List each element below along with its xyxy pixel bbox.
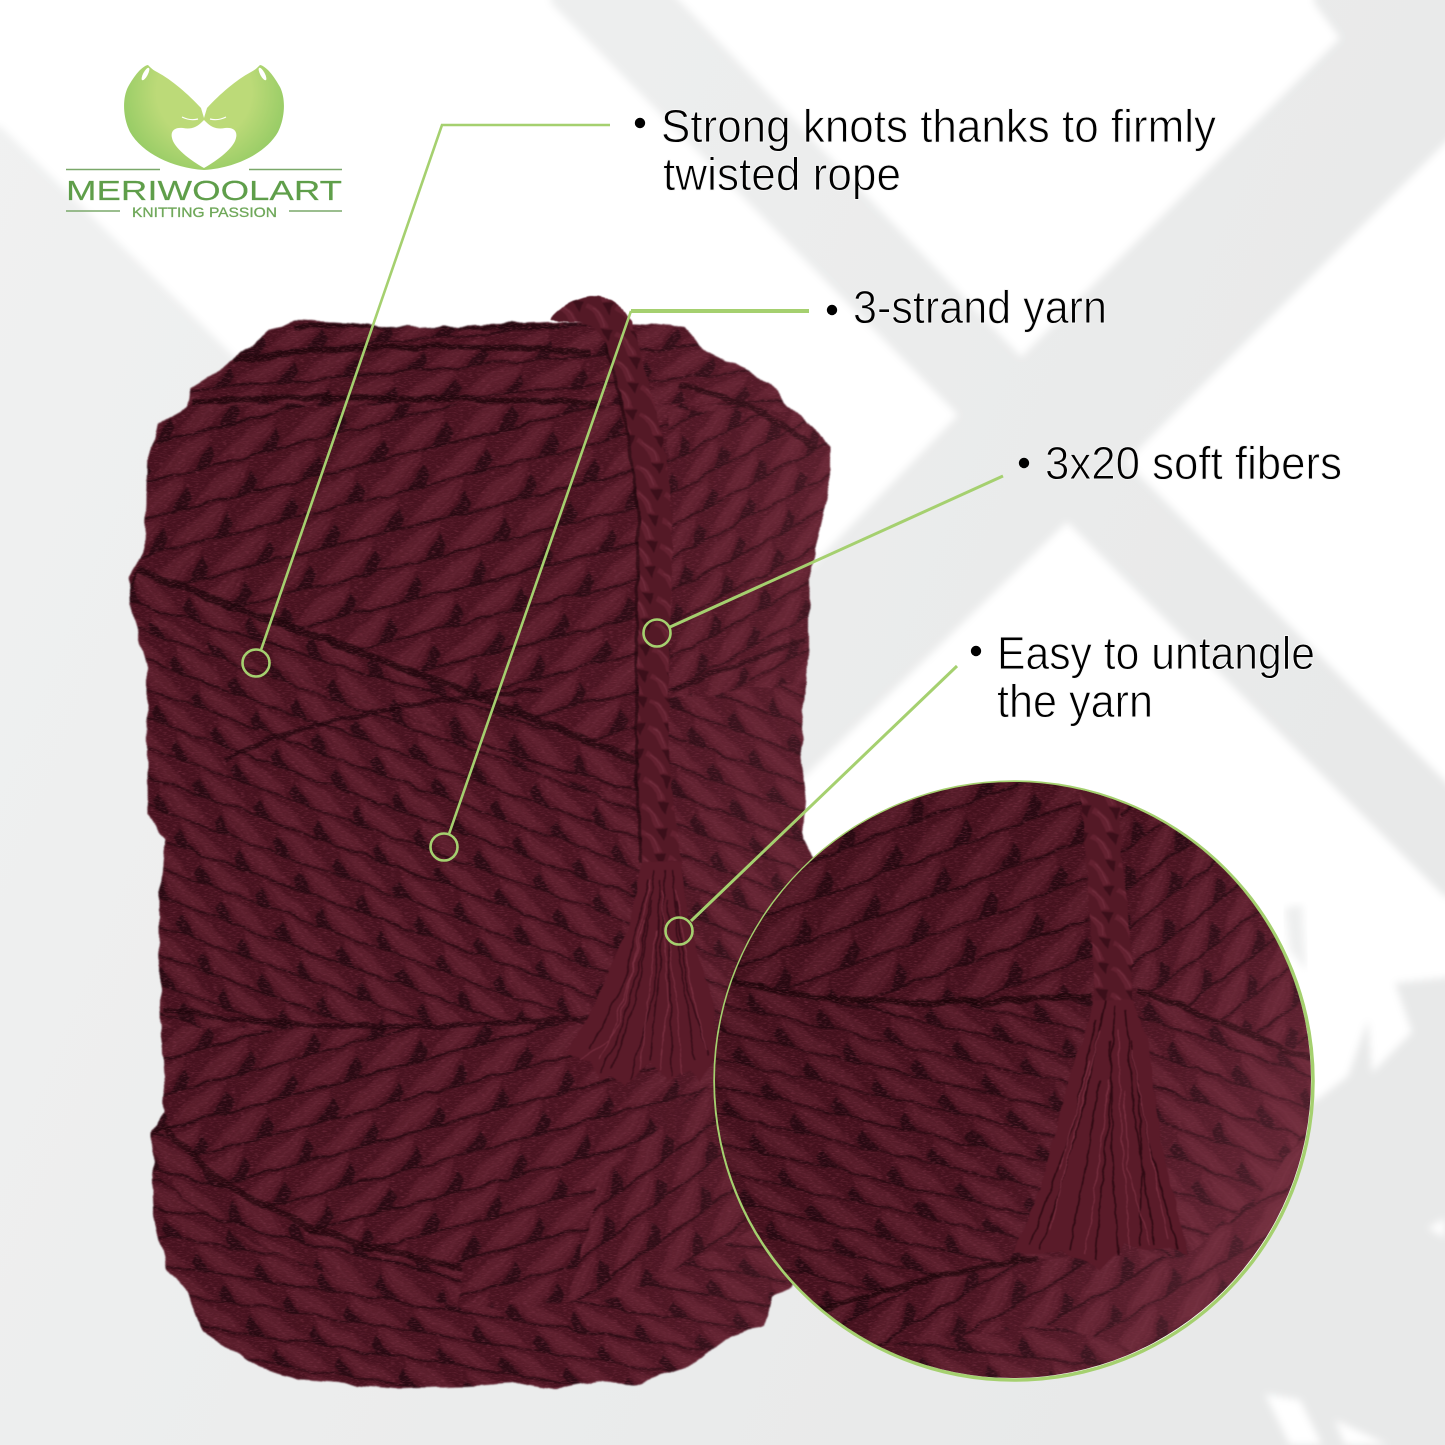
text: easy to untangle xyxy=(971,627,1315,727)
top crevices xyxy=(191,324,815,450)
text: soft fibers: 3x20 soft fibers xyxy=(1045,437,1342,489)
logo rules xyxy=(66,170,342,211)
logo: Meriwoolart xyxy=(66,65,342,220)
zoom circle: close-up of tassel xyxy=(713,780,1315,1382)
tail strand xyxy=(550,296,681,862)
text: easy to untangle: the yarn xyxy=(997,675,1153,727)
tassel xyxy=(567,862,717,1086)
yarn spool xyxy=(120,296,840,1400)
logo wordmark: MERIWOOLART xyxy=(66,175,342,206)
spool body rope sections xyxy=(120,300,840,1400)
wrap rope over the upper body xyxy=(130,588,655,794)
text: strong knots: twisted rope xyxy=(663,148,901,200)
tail shadow xyxy=(607,345,642,862)
wrap rope over the lower body xyxy=(150,1137,460,1288)
text: easy to untangle: Easy to untangle xyxy=(997,627,1315,679)
close-up tail and tassel xyxy=(1013,775,1188,1270)
logo tagline: KNITTING PASSION xyxy=(132,204,277,220)
callout line: 3-strand yarn xyxy=(430,311,809,860)
callout line: strong knots xyxy=(242,125,610,676)
logo icon: two facing animals forming a heart xyxy=(124,65,284,170)
green ring xyxy=(715,782,1313,1380)
callout line: soft fibers xyxy=(644,476,1003,646)
close-up rope texture xyxy=(715,782,1311,1378)
text: strong knots xyxy=(635,100,1216,200)
text: 3-strand yarn: 3-strand yarn xyxy=(853,281,1107,333)
callout line: easy to untangle xyxy=(666,666,957,944)
text: strong knots: Strong knots thanks to firmly xyxy=(661,100,1216,152)
